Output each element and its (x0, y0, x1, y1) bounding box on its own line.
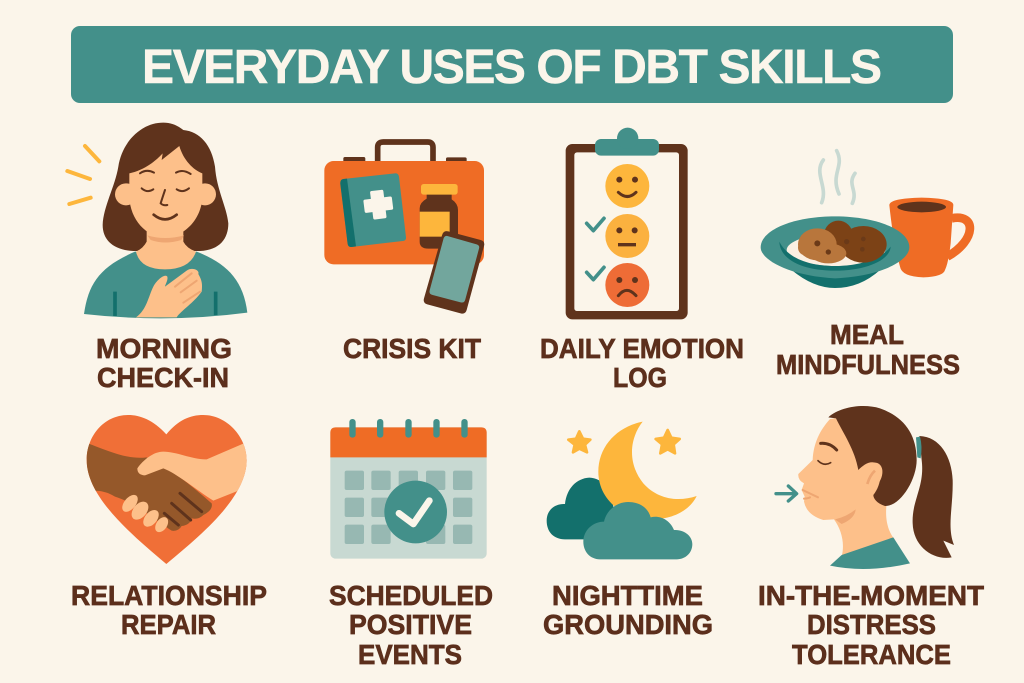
panel: meal mindfulness label: MINDFULNESS (776, 349, 960, 380)
panel: daily emotion log (540, 128, 970, 393)
title banner (71, 26, 953, 103)
label: NIGHTTIME (552, 580, 703, 611)
panel: in-the-moment distress tolerance (758, 406, 984, 670)
label: MORNING (96, 333, 232, 364)
panel: scheduled positive events (329, 419, 493, 670)
label (758, 580, 984, 670)
icon: first aid case (324, 142, 484, 314)
label (540, 333, 744, 393)
icon: clipboard with faces (566, 128, 970, 319)
label: REPAIR (121, 609, 216, 640)
label: LOG (613, 362, 667, 393)
label (329, 580, 493, 670)
icon: profile breathing in (776, 406, 954, 569)
label: TOLERANCE (792, 639, 951, 670)
label: DAILY EMOTION (540, 333, 744, 364)
panel: relationship repair (71, 415, 267, 640)
label: GROUNDING (543, 609, 713, 640)
label: SCHEDULED (329, 580, 493, 611)
icon: plate and coffee (761, 151, 970, 288)
panel: crisis kit (324, 142, 484, 364)
label: CHECK-IN (97, 362, 229, 393)
label: IN-THE-MOMENT (758, 580, 984, 611)
icon: moon, stars and clouds (547, 422, 697, 559)
label: RELATIONSHIP (71, 580, 267, 611)
panel: nighttime grounding (543, 422, 713, 640)
label: POSITIVE (349, 609, 472, 640)
label: CRISIS KIT (343, 333, 481, 364)
icon: handshake in heart (83, 415, 250, 564)
title banner: EVERYDAY USES OF DBT SKILLS (142, 41, 882, 94)
label: EVENTS (358, 639, 462, 670)
panel: meal mindfulness label (776, 319, 960, 380)
label: DISTRESS (807, 609, 936, 640)
icon: woman with hand on heart (67, 123, 247, 318)
label (543, 580, 713, 640)
panel: meal mindfulness label: MEAL (830, 319, 904, 350)
label (96, 333, 232, 393)
panel: morning check-in (67, 123, 247, 393)
label (71, 580, 267, 640)
icon: calendar with check (330, 419, 487, 559)
